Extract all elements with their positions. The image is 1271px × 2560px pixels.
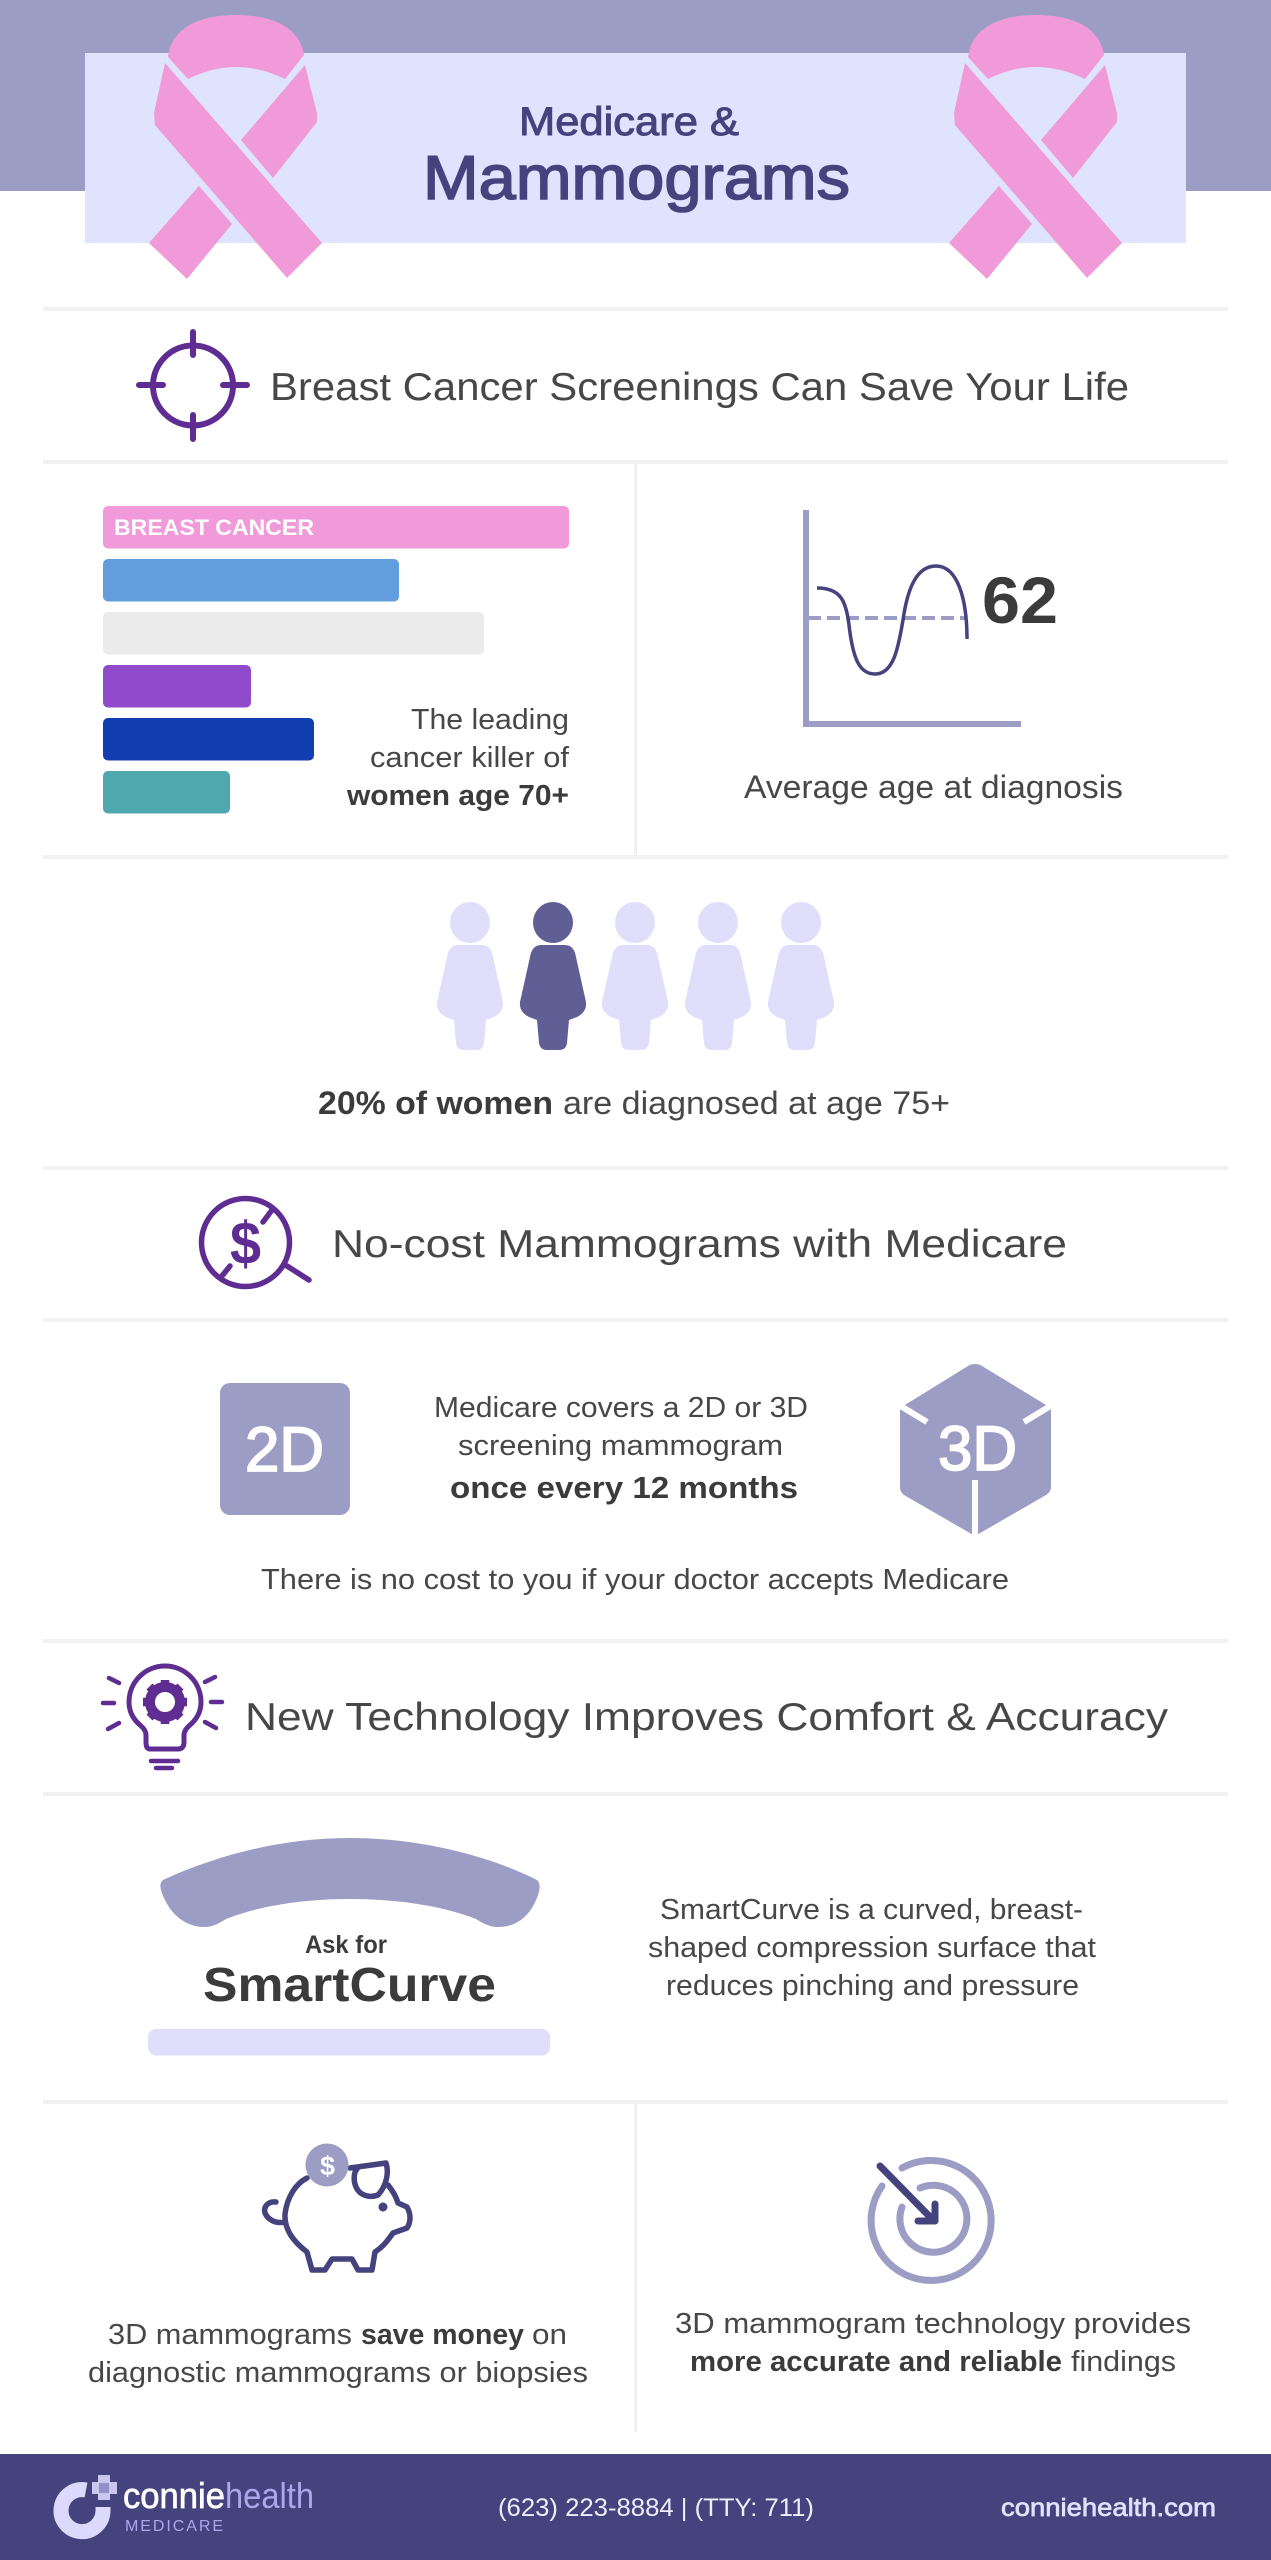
text: medicare covers: once every 12 months [450,1470,798,1505]
text: leading cancer killer: women age 70+ [346,780,569,812]
text: more accurate: 3D mammogram technology provides [675,2308,1191,2340]
text: leading cancer killer: cancer killer of [370,742,570,774]
panel: SmartCurve [148,1838,1096,2056]
icon: left pink ribbon [149,15,322,279]
icon: curved compression surface [160,1838,540,1927]
logo: conniehealth medicare: connie [123,2475,225,2516]
text: leading cancer killer [346,704,570,812]
text: save money: 3D mammograms [108,2319,352,2351]
heading: no-cost mammograms: No-cost Mammograms with Medicare [332,1223,1067,1266]
heading: breast cancer screenings: Breast Cancer Screenings Can Save Your Life [270,366,1129,409]
logo: conniehealth medicare: MEDICARE [125,2518,223,2535]
text: smartcurve description [648,1894,1096,2002]
panel: average age at diagnosis [744,510,1123,805]
icon: no dollar magnifier: $ [230,1210,261,1277]
text: smartcurve description: SmartCurve is a curved, breast- [660,1894,1083,1926]
icon: 3D cube [899,1364,1052,1540]
panel: 20 percent of women [318,902,950,1121]
text: ask for smartcurve: SmartCurve [203,1959,496,2012]
heading: new technology: New Technology Improves Comfort & Accuracy [245,1696,1169,1739]
logo: conniehealth medicare [61,2475,314,2535]
icon: lightbulb with gear [103,1666,222,1768]
text: more accurate: findings [1071,2346,1176,2378]
text: medicare covers: Medicare covers a 2D or 3D [434,1392,808,1424]
text: medicare covers [434,1392,808,1505]
text: 20 percent of women diagnosed [318,1085,950,1121]
title panel [85,53,1186,243]
bar: breast cancer [103,506,569,548]
text: more accurate: more accurate and reliable [690,2346,1062,2378]
text: no cost note: There is no cost to you if your doctor accepts Medicare [261,1564,1009,1596]
panel: save money [88,2144,588,2389]
text: smartcurve description: reduces pinching and pressure [666,1970,1079,2002]
text: more accurate [675,2308,1191,2378]
text: save money: diagnostic mammograms or biopsies [88,2357,588,2389]
chart: age curve [806,510,1021,724]
website: conniehealth.com [1001,2494,1216,2522]
text: 20 percent of women diagnosed: 20% of women [318,1085,553,1121]
phone number: (623) 223-8884 | (TTY: 711) [498,2494,814,2522]
logo: conniehealth medicare: health [225,2475,314,2516]
icon: 2D tile [220,1383,350,1515]
bar: navy [103,718,314,760]
text: leading cancer killer: The leading [411,704,569,736]
pale bar [148,2029,550,2056]
title [423,100,850,213]
icon: row of five women [437,902,834,1050]
text: medicare covers: screening mammogram [458,1430,783,1462]
title: Mammograms [423,144,850,213]
text: average age: Average age at diagnosis [744,769,1123,805]
text: ask for smartcurve [203,1931,496,2012]
text: ask for smartcurve: Ask for [305,1931,387,1959]
icon: no dollar magnifier [202,1198,309,1286]
icon: 3D cube: 3D [938,1414,1017,1484]
bar: teal [103,771,230,814]
bar: blue [103,559,399,602]
title: Medicare & [519,100,739,144]
text: smartcurve description: shaped compression surface that [648,1932,1096,1964]
header band [0,0,1271,191]
text: save money [88,2319,588,2389]
icon: piggy bank with coin: $ [320,2151,335,2181]
bar: grey [103,612,484,654]
footer [0,2454,1271,2560]
icon: bullseye with arrow [871,2160,991,2280]
text: save money: on [532,2319,567,2351]
panel: more accurate [675,2160,1191,2378]
icon: crosshair target [139,332,247,439]
icon: right pink ribbon [949,15,1122,279]
panel: 2D and 3D coverage [220,1364,1052,1596]
icon: piggy bank with coin [265,2144,410,2270]
bar: purple [103,665,251,708]
icon: 2D tile: 2D [245,1415,324,1485]
text: save money: save money [361,2319,524,2351]
number: 62: 62 [982,563,1058,637]
panel: leading cancer killer bar chart [103,506,570,814]
bar: breast cancer: BREAST CANCER [114,515,314,540]
text: 20 percent of women diagnosed: are diagnosed at age 75+ [563,1085,950,1121]
